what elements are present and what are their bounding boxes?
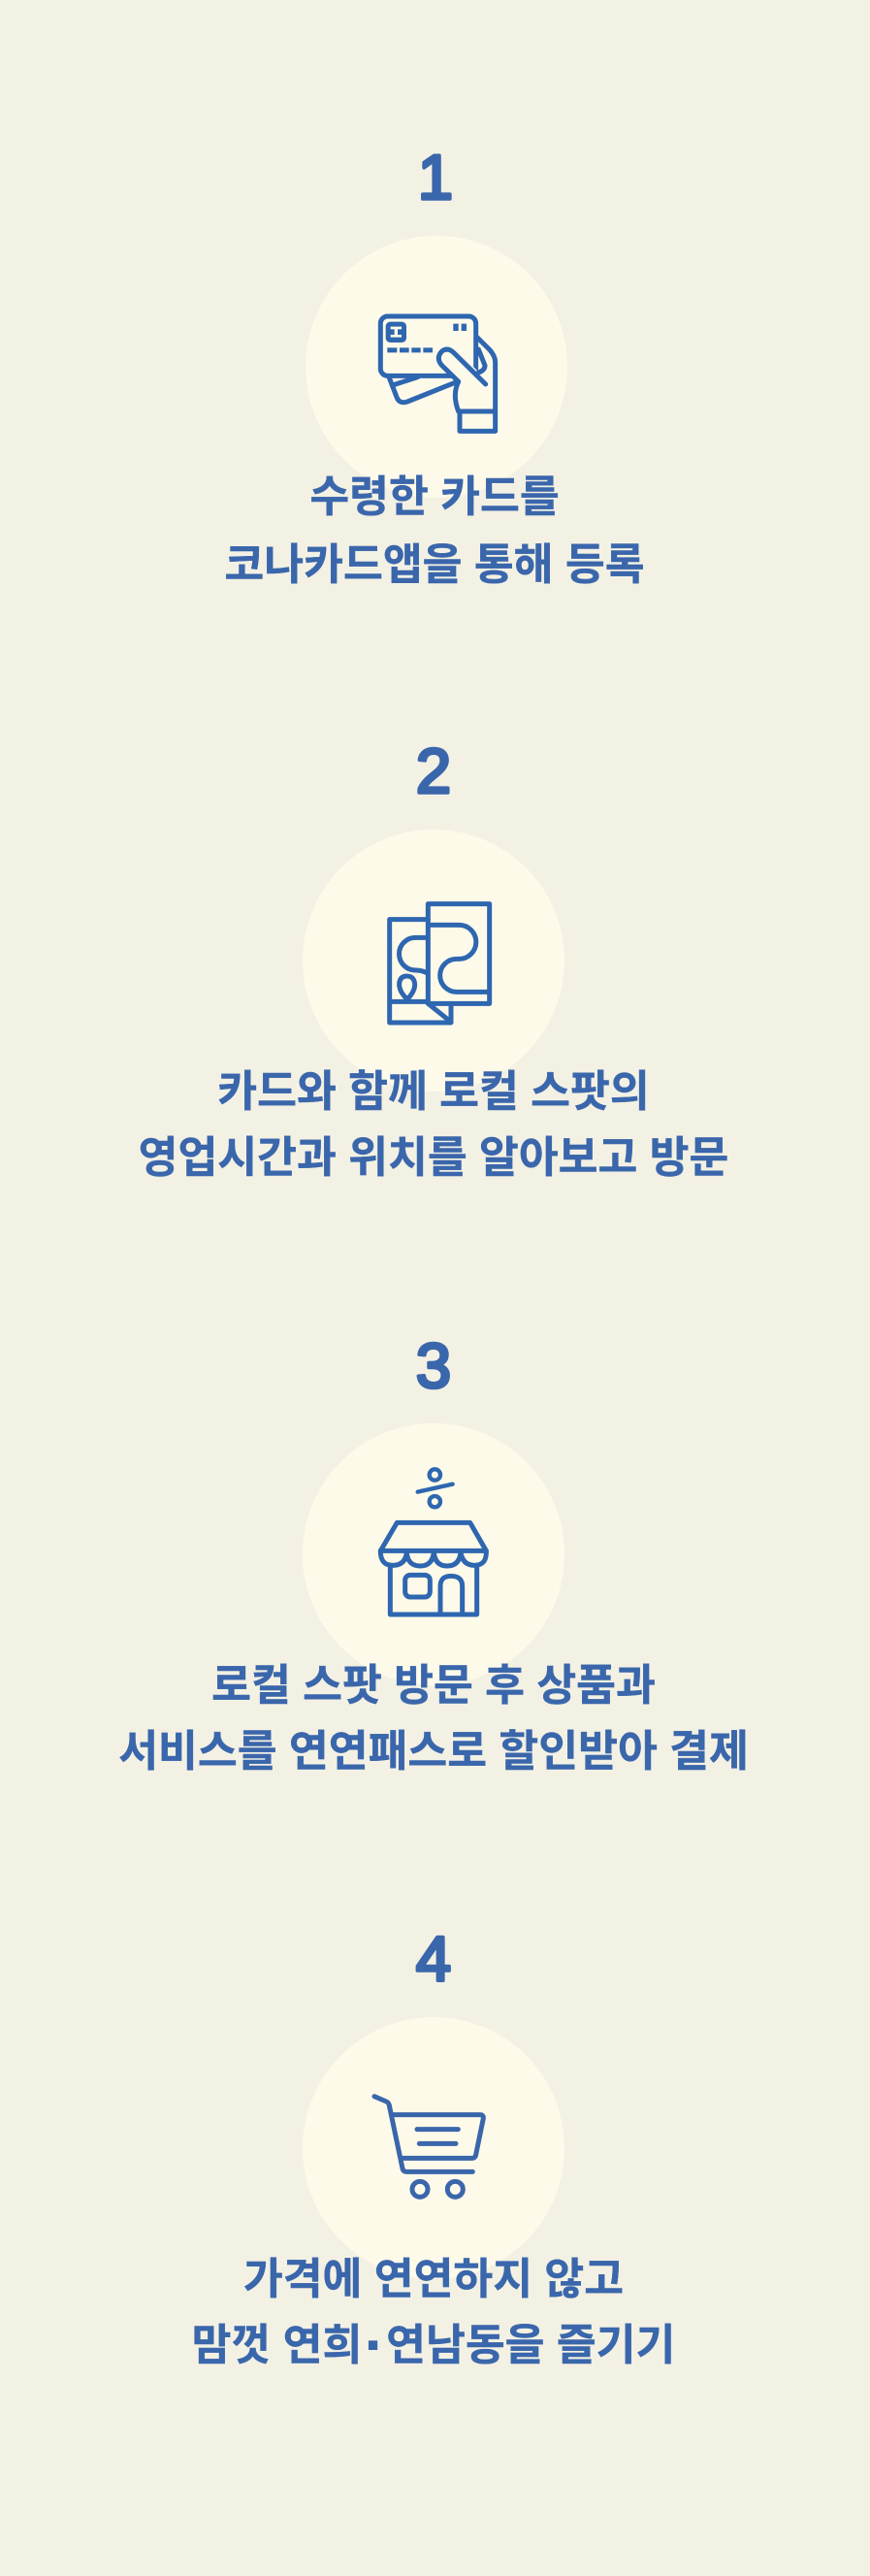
number 4: 4 [416, 1923, 451, 1994]
text block 3: 로컬 스팟 방문 후 상품과 [211, 1662, 656, 1710]
circle background 3 [303, 1423, 564, 1685]
text block 1: 수령한 카드를 [309, 473, 560, 521]
step 1 [224, 142, 645, 589]
text block 3: 서비스를 연연패스로 할인받아 결제 [118, 1728, 749, 1776]
circle background 4 [303, 2017, 564, 2279]
number 3: 3 [416, 1330, 451, 1401]
step 3 [118, 1330, 749, 1776]
text block 2: 카드와 함께 로컬 스팟의 [217, 1068, 650, 1116]
text block 3 [118, 1662, 749, 1776]
text block 1: 코나카드앱을 통해 등록 [224, 541, 645, 589]
icon: shopping cart [374, 2097, 483, 2197]
number 2: 2 [416, 735, 451, 806]
circle background 1 [306, 236, 567, 498]
number 1: 1 [418, 142, 453, 212]
text block 2 [139, 1068, 728, 1182]
icon: hand holding cards [380, 316, 496, 431]
icon: folded map [390, 904, 490, 1023]
icon: shop with percent sign [380, 1469, 486, 1614]
text block 4 [192, 2256, 675, 2369]
step 2 [139, 735, 728, 1182]
step 4 [192, 1923, 675, 2369]
text block 4: 가격에 연연하지 않고 [243, 2256, 624, 2303]
text block 1 [224, 473, 645, 589]
circle background 2 [303, 830, 564, 1092]
text block 2: 영업시간과 위치를 알아보고 방문 [139, 1134, 728, 1182]
text block 4: 맘껏 연희·연남동을 즐기기 [192, 2322, 675, 2369]
